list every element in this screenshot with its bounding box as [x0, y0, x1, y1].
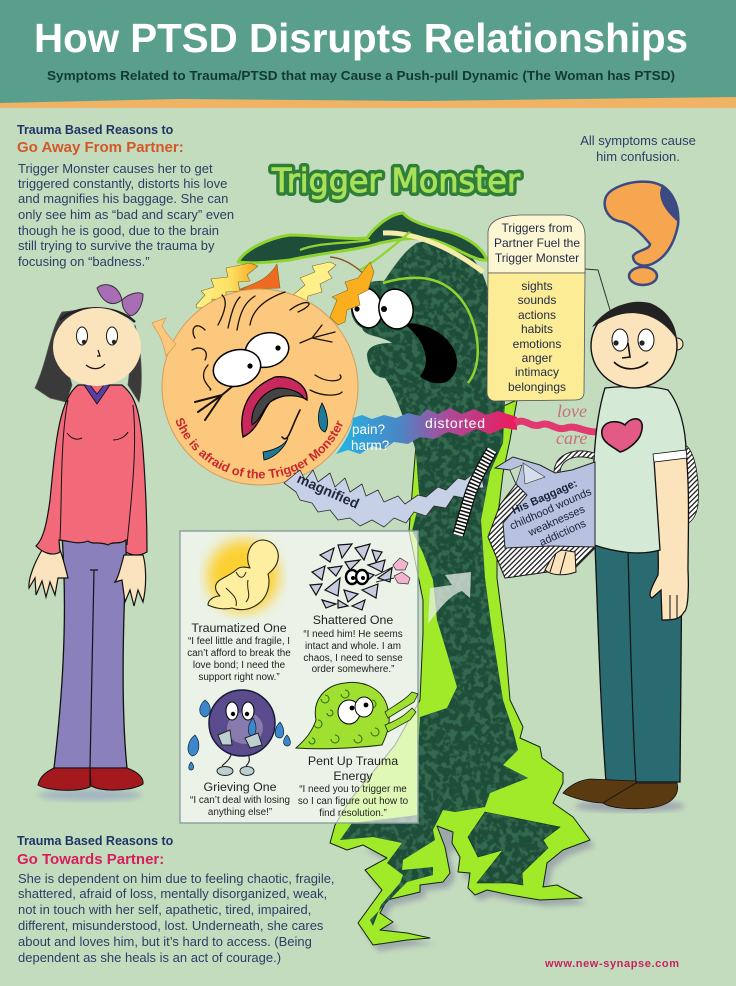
panel: inner selves — [180, 531, 418, 823]
love wave: love — [557, 401, 587, 421]
callout: triggers: belongings — [508, 380, 566, 394]
monster hair — [238, 213, 487, 263]
man arm — [650, 452, 688, 620]
caption: grieving one — [190, 780, 290, 818]
monster mouth — [403, 323, 457, 383]
woman hair — [35, 310, 141, 402]
caption: traumatized one: “I feel little and fragile, I — [188, 636, 290, 647]
caption: pent up trauma energy: Pent Up Trauma — [308, 754, 398, 768]
text: confusion note: All symptoms cause — [580, 133, 696, 148]
text block: go away from partner: and magnifies his baggage. She can — [18, 191, 228, 206]
heading: Trigger Monster: Trigger Monster — [271, 161, 520, 200]
magnified arrow — [284, 468, 484, 527]
text block: go away from partner: though he is good, due to the brain — [18, 223, 219, 238]
caption: traumatized one: support right now.” — [198, 672, 280, 683]
callout: triggers — [487, 215, 610, 401]
text block: go towards partner: about and loves him, but it’s hard to access. (Being — [18, 934, 312, 949]
monster eyes — [348, 285, 417, 332]
callout: triggers: Partner Fuel the — [494, 236, 580, 250]
text block: go away from partner: Trigger Monster causes her to get — [18, 161, 213, 176]
love wave — [515, 401, 605, 448]
lightning bolts — [196, 262, 374, 325]
caption: pent up trauma energy — [298, 754, 409, 819]
illustration: trigger monster — [152, 212, 596, 953]
callout: triggers: intimacy — [515, 365, 559, 379]
caption: grieving one: Grieving One — [203, 780, 277, 794]
text block: go away from partner: focusing on “badness.” — [18, 254, 150, 269]
baggage hand — [545, 550, 576, 575]
text block: go away from partner: Trauma Based Reasons to — [17, 123, 174, 137]
woman shoes — [38, 768, 90, 790]
text: confusion note — [580, 133, 696, 164]
distorted beam: distorted — [425, 415, 485, 431]
caption: grieving one: anything else!” — [208, 807, 272, 818]
woman trousers — [54, 535, 127, 768]
panic face balloon — [152, 288, 358, 486]
translucent arrow — [428, 572, 471, 624]
text block: go towards partner: dependent as she heals is an act of courage.) — [18, 950, 281, 965]
text block: go away from partner: Go Away From Partner: — [17, 139, 184, 156]
text block: go towards partner: not in touch with her self, apathetic, tired, impaired, — [18, 902, 311, 917]
text block: go towards partner: shattered, afraid of loss, mentally disorganized, weak, — [18, 886, 327, 901]
callout: triggers: sights — [521, 279, 553, 293]
man trousers — [595, 545, 682, 782]
icon: shattered ball — [310, 544, 410, 610]
baggage text: weaknesses — [526, 503, 587, 539]
caption: traumatized one — [187, 621, 291, 683]
woman shadow — [38, 789, 142, 801]
caption: grieving one: “I can’t deal with losing — [190, 795, 290, 806]
callout: triggers: Trigger Monster — [495, 251, 579, 265]
baggage spring — [458, 450, 492, 535]
magnified arrow: magnified — [295, 470, 362, 512]
source url: www.new-synapse.com — [544, 958, 679, 970]
monster shadow — [352, 809, 595, 951]
caption: shattered one — [303, 613, 403, 675]
title: How PTSD Disrupts Relationships — [34, 15, 688, 61]
text block: go towards partner: She is dependent on him due to feeling chaotic, fragile, — [18, 871, 335, 886]
icon: pent up energy blob — [296, 682, 418, 749]
icon: baby — [207, 540, 279, 612]
distorted beam — [336, 408, 517, 454]
caption: shattered one: intact and whole. I am — [305, 641, 401, 652]
love wave: care — [556, 428, 587, 448]
text: confusion note: him confusion. — [596, 149, 680, 164]
caption: shattered one: chaos, I need to sense — [303, 653, 403, 664]
monster lime drips — [330, 400, 590, 945]
text block: go towards partner: different, misunderstood, lost. Underneath, she cares — [18, 918, 324, 933]
question mark — [605, 182, 678, 266]
caption: traumatized one: can’t afford to break the — [187, 648, 291, 659]
balloon caption: She is afraid of the Trigger Monster — [176, 418, 343, 478]
header banner — [0, 0, 736, 108]
man shadow — [575, 800, 685, 812]
caption: traumatized one: Traumatized One — [191, 621, 287, 635]
text block: go towards partner — [17, 834, 335, 965]
distorted beam: pain? — [352, 422, 385, 437]
caption: pent up trauma energy: so I can figure out how to — [298, 796, 409, 807]
caption: traumatized one: love bond; I need the — [193, 660, 286, 671]
distorted beam: harm? — [351, 438, 389, 453]
woman bow — [97, 285, 143, 316]
baggage text: addictions — [538, 518, 588, 549]
man shoes — [563, 779, 637, 803]
man heart — [602, 419, 642, 452]
caption: shattered one: “I need him! He seems — [303, 629, 403, 640]
woman sweater — [36, 385, 147, 555]
caption: shattered one: order somewhere.” — [312, 664, 394, 675]
callout: triggers: anger — [522, 351, 552, 365]
text block: go away from partner: only see him as “bad and scary” even — [18, 207, 234, 222]
illustration: woman — [29, 285, 147, 801]
man head — [671, 338, 683, 350]
baggage text — [508, 477, 594, 549]
callout: triggers: emotions — [513, 337, 561, 351]
illustration: man — [563, 182, 698, 812]
balloon mouth — [242, 377, 307, 437]
caption: pent up trauma energy: find resolution.” — [319, 808, 387, 819]
caption: shattered one: Shattered One — [313, 613, 393, 627]
baggage text: His Baggage: — [510, 477, 579, 517]
callout: triggers: habits — [521, 322, 553, 336]
text block: go away from partner: triggered constantly, distorts his love — [18, 176, 227, 191]
callout: triggers: actions — [518, 308, 556, 322]
caption: pent up trauma energy: “I need you to trigger me — [299, 784, 407, 795]
text block: go towards partner: Go Towards Partner: — [17, 851, 164, 868]
balloon wrinkles — [192, 292, 342, 439]
woman hands — [29, 550, 68, 597]
man back hatched bag — [683, 445, 698, 525]
icon: grieving ball — [188, 690, 290, 776]
baggage — [488, 454, 595, 578]
text block: go towards partner: Trauma Based Reasons to — [17, 834, 174, 848]
text block: go away from partner: still trying to survive the trauma by — [18, 238, 215, 253]
callout: triggers: Triggers from — [502, 221, 572, 235]
woman head — [60, 308, 135, 322]
callout: triggers: sounds — [518, 293, 556, 307]
subtitle: Symptoms Related to Trauma/PTSD that may Cause a Push-pull Dynamic (The Woman has PTSD) — [47, 69, 675, 83]
man shirt — [593, 386, 686, 553]
bag body — [488, 457, 595, 578]
heading: Trigger Monster: Trigger Monster — [271, 161, 520, 200]
caption: pent up trauma energy: Energy — [333, 769, 373, 783]
baggage text: childhood wounds — [508, 486, 594, 533]
text block: go away from partner — [17, 123, 234, 269]
monster lower lobe — [468, 812, 560, 885]
bag handle — [557, 454, 594, 472]
monster dark body — [340, 241, 528, 926]
